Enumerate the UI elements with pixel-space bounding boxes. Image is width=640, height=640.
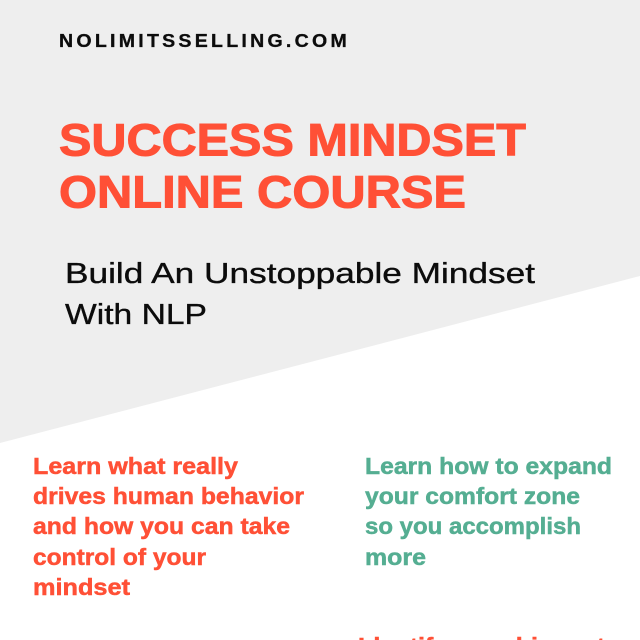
text block: comfort zone: your comfort zone bbox=[365, 483, 580, 509]
text block: human behavior: drives human behavior bbox=[33, 483, 304, 509]
subtitle bbox=[65, 258, 535, 331]
text block: human behavior: and how you can take bbox=[33, 513, 290, 539]
background: angled grey panel bbox=[0, 0, 640, 443]
text block: comfort zone: so you accomplish bbox=[365, 513, 581, 539]
subtitle: With NLP bbox=[65, 299, 207, 331]
title: ONLINE COURSE bbox=[59, 166, 466, 218]
text block: human behavior: Learn what really bbox=[33, 453, 238, 479]
text block: human behavior: mindset bbox=[33, 574, 130, 600]
text block: comfort zone: Learn how to expand bbox=[365, 453, 612, 479]
title: SUCCESS MINDSET bbox=[59, 114, 526, 166]
text block: human behavior bbox=[33, 453, 304, 600]
subtitle: Build An Unstoppable Mindset bbox=[65, 258, 535, 290]
text block: comfort zone bbox=[365, 453, 612, 570]
website name: NOLIMITSSELLING.COM bbox=[59, 31, 350, 51]
text block: human behavior: control of your bbox=[33, 544, 206, 570]
text block: comfort zone: more bbox=[365, 544, 426, 570]
title bbox=[59, 114, 526, 218]
